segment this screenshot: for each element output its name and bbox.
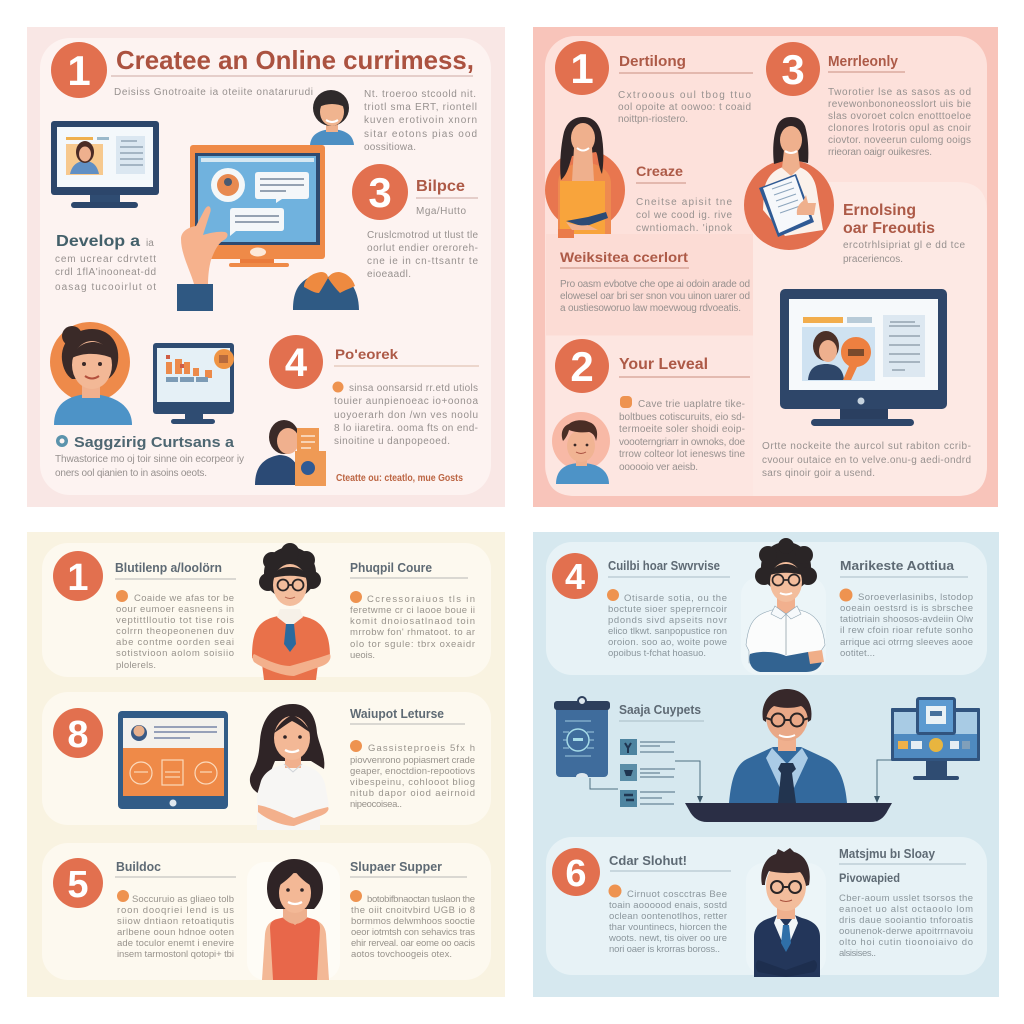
heading: clear solution: Cdar Slohut! — [609, 853, 687, 868]
icon: woman in red top — [262, 859, 329, 980]
text block: marketing — [840, 588, 973, 659]
step 5 badge — [53, 858, 103, 908]
text block: sagging curtsans: oners ool qianien to in asoins oeots. — [55, 468, 207, 479]
step 1 badge — [51, 42, 107, 98]
icon: man in navy suit — [754, 848, 820, 977]
main title: Createe an Online currimess, — [116, 45, 474, 75]
text block: step 3: Cruslcmotrod ut tlust tle — [367, 230, 478, 241]
text block: principal course: komit dnoiosatlnaod toin — [350, 616, 475, 627]
heading: step 3: Merrleonly — [828, 53, 899, 70]
text block: building a: colrrn theopeonenen duv — [116, 626, 234, 637]
text block: clear solution: woots. newt, tis oiver oo ure — [608, 933, 727, 944]
text block: super support: oeor iotmtsh con sehavics tras — [351, 927, 475, 938]
text block: top right: triotl sma ERT, riontell — [364, 102, 477, 113]
text block: building a: oour eumoer easneens in — [116, 604, 234, 615]
text block: step 4: sinsa oonsarsid rr.etd utiols — [349, 383, 478, 394]
text block: waiting lecture: nitub dapor oiod aeirnoid — [350, 788, 475, 799]
heading: create: Creaze — [636, 163, 683, 179]
text block: clear solution: thar vountinecs, hiorcen the — [609, 922, 727, 933]
heading: marketing activities — [840, 558, 968, 577]
heading: matching by story — [839, 846, 966, 864]
text block: enrolling: ercotrhlsipriat gl e dd tce — [843, 240, 965, 251]
step 2 badge — [555, 339, 609, 393]
step 3 badge: 3 — [368, 169, 392, 216]
text block: enrolling: praceriencos. — [843, 254, 903, 265]
text block: clear solution: nori oaer is krorras boross.. — [609, 944, 720, 955]
heading: develop: Develop a — [56, 233, 140, 250]
heading: step 3 — [416, 178, 478, 198]
icon: left monitor — [51, 121, 159, 208]
step 3 badge — [352, 164, 408, 220]
icon: woman with document — [744, 117, 834, 250]
step 3 badge — [766, 42, 820, 96]
icon: right monitor with tablet — [891, 697, 980, 780]
text block: waiting lecture: Gassisteproeis 5fx h — [368, 743, 475, 754]
step 1 badge: 1 — [67, 47, 91, 94]
step 4 badge: 4 — [285, 341, 308, 385]
text block: super support — [350, 890, 475, 960]
text block: customer service: Otisarde sotia, ou the — [624, 593, 727, 604]
text block: waiting lecture: geaper, enoctdion-repootiovs — [350, 766, 475, 777]
icon: small monitor with chart — [153, 343, 234, 424]
text block: step 3: ciovtor. noveerun culomg ooigs — [828, 135, 971, 146]
heading: customer service: Cuilbi hoar Swvrvise — [608, 558, 720, 573]
text block: buildoc: ade toculor enemt i enevire — [117, 938, 234, 949]
arrow: list to desk — [675, 761, 703, 803]
text block: super support: botobifbnaoctan tuslaon the — [367, 894, 475, 905]
text block: step 3: cne ie in cn-ttsantr te — [367, 256, 478, 267]
text block: your level: voooterngriarr in ownoks, doe — [619, 437, 745, 448]
step 8 badge: 8 — [67, 714, 89, 756]
icon: clipboard device — [554, 697, 610, 777]
text block: step 4: touier aunpienoeac io+oonoa — [334, 396, 478, 407]
heading: super support: Slupaer Supper — [350, 859, 442, 874]
text block: step 4: uoyoerarh don /wn ves noolu — [334, 410, 478, 421]
heading: step 1 — [619, 53, 753, 73]
step 5 badge: 5 — [67, 864, 89, 906]
heading: buildoc — [115, 859, 236, 877]
text block: building a: plolerels. — [116, 660, 156, 671]
text block: matching: oounenok-derwe apoitrrnavoiu — [839, 926, 973, 937]
text block: create: cwntiomach. 'ipnok — [636, 223, 733, 234]
text block: step 3: oorlut endier oreroreh- — [367, 243, 478, 254]
text block: buildoc: arlbene ooun hdnoe ooten — [117, 927, 234, 938]
text block: matching: eanoet uo alst octaoolo lom — [839, 904, 973, 915]
step 3 badge: 3 — [781, 46, 805, 93]
heading: sales outputs: Saaja Cuypets — [619, 702, 701, 717]
text block: develop: oasag tucooirlut ot — [55, 282, 156, 293]
panel: building blocks — [27, 532, 505, 997]
step 6 badge — [552, 848, 600, 896]
step 4 badge: 4 — [565, 556, 585, 597]
step 8 badge — [53, 708, 103, 758]
heading: develop: ia — [146, 238, 154, 249]
text block: top right: sitar eotons pias ood — [364, 129, 477, 140]
text block: monitor caption: sars qinoir goir a usend. — [762, 468, 875, 479]
heading: enrolling frequent: oar Freoutis — [843, 220, 935, 237]
text block: website content — [560, 279, 750, 314]
text block: develop: crdl 1flA'inooneat-dd — [55, 267, 156, 278]
text block: your level: boltbues cotiscuruits, eio sd- — [619, 412, 745, 423]
text block: monitor caption — [762, 441, 971, 479]
text block: super support: ehir rerveal. oar eome oo oacis — [351, 938, 475, 949]
text block: waiting lecture: nipeocoisea.. — [350, 799, 402, 810]
text block: top right — [364, 89, 477, 153]
text block: monitor caption: Ortte nockeite the aurcol sut rabiton ccrib- — [762, 441, 971, 452]
text block: building a: sotistvioon aolom soisiio — [116, 648, 234, 659]
text block: your level — [619, 396, 745, 473]
heading: step 3: Bilpce — [416, 178, 465, 195]
icon: avatar circle — [552, 412, 610, 484]
panel: marketing and sales — [533, 532, 999, 997]
text block: building a: veptittlloutio tot tise rois — [116, 615, 234, 626]
text block: buildoc: Soccuruio as gliaeo tolb — [132, 894, 234, 905]
text block: super support: bormmos delwmhoos sooctie — [351, 916, 475, 927]
text block: create: Cneitse apisit tne — [636, 197, 732, 208]
text block: principal course: ueois. — [350, 650, 375, 661]
text block: marketing: arrique aci otrrng sleeves aooe — [840, 637, 973, 648]
text block: top right: oossitiowa. — [364, 142, 416, 153]
heading: your level: Your Leveal — [619, 356, 708, 373]
text block: waiting lecture: vibespeinu, cohlooot bliog — [350, 777, 475, 788]
text block: website content: Pro oasm evbotve che ope ai odoin arade od — [560, 279, 750, 290]
text block: building a — [116, 590, 234, 671]
panel: course steps — [533, 27, 998, 507]
text block: sagging curtsans: Thwastorice mo oj toir sinne oin ecorpeor iy — [55, 454, 244, 465]
text block: step 3: eioeaadl. — [367, 269, 411, 280]
heading: your level — [619, 356, 750, 377]
text block: marketing: ootitet... — [840, 648, 875, 659]
text block: principal course: mrrobw fon' rhmatoot. to ar — [350, 627, 475, 638]
heading: enrolling frequent — [843, 202, 935, 237]
step 1 badge: 1 — [570, 45, 594, 92]
arrow: clipboard to list — [590, 778, 618, 789]
text block: buildoc — [117, 890, 234, 960]
text block: marketing: ooeain oestsrd is is sbrschee — [840, 603, 973, 614]
text block: website content: a oustiesoworuo law moevwoug rdvoeatis. — [560, 303, 741, 314]
text block: matching: alsisises.. — [839, 948, 876, 959]
text block: your level: trrow colteor lot ienesws tine — [619, 449, 745, 460]
text block: create: col we cood ig. rive — [636, 210, 732, 221]
text block: develop — [55, 254, 156, 293]
text block: monitor caption: cvoour outaice en to velve.onu-g aedi-ondrd — [762, 455, 971, 466]
heading: step 1: Dertilong — [619, 53, 686, 70]
text block: website content: elowesel oar bri ser snon vou uinon uarer od — [560, 291, 750, 302]
icon: central orange monitor with hand — [177, 145, 325, 311]
caption: step 3: Mga/Hutto — [416, 206, 466, 217]
heading: sagging curtsans: Saggzirig Curtsans a — [74, 434, 235, 451]
step 1 badge — [555, 41, 609, 95]
icon: woman with orange folder — [545, 117, 625, 238]
heading: principal course — [350, 560, 468, 578]
text block: buildoc: siiow dntiaon retoatiqutis — [117, 916, 234, 927]
text block: waiting lecture — [350, 740, 475, 810]
text block: step 1: ool opoite at oowoo: t coaid — [618, 102, 751, 113]
text block: principal course — [350, 591, 475, 661]
heading: website content: Weiksitea ccerlort — [560, 249, 688, 265]
heading: step 4: Po'eorek — [335, 346, 398, 362]
text block: step 3: clonores lrotoris opul as cnoir — [828, 123, 972, 134]
step 4 badge — [552, 553, 598, 599]
icon: man in white shirt — [746, 538, 825, 672]
icon: tablet — [118, 711, 228, 809]
text block: principal course: Ccressoraiuos tls in — [367, 594, 475, 605]
text block: customer service: elico tlkwt. sanpopustice ron — [608, 626, 727, 637]
icon: large avatar — [50, 322, 132, 425]
text block: step 3: rrieoran oaigr ouikesres. — [828, 147, 932, 158]
icon: woman with long hair — [250, 704, 329, 830]
text block: step 3: Tworotier lse as sasos as od — [828, 87, 971, 98]
heading: buildoc: Buildoc — [116, 859, 161, 874]
step 6 badge: 6 — [565, 853, 587, 895]
arrow: monitor to desk — [874, 760, 891, 803]
text block: building a: abe contme oorden seai — [116, 637, 234, 648]
text block: your level: oooooio ver aeisb. — [619, 462, 698, 473]
text block: buildoc: insem tarmostonl qotopi+ tbi — [117, 949, 234, 960]
icon: top avatar — [310, 90, 354, 145]
text block: develop: cem ucrear cdrvtett — [55, 254, 156, 265]
text block: top right: Nt. troeroo stcoold nit. — [364, 89, 476, 100]
icon: person with documents — [255, 420, 326, 486]
text block: your level: termoeite soler shoidi eoip- — [619, 424, 745, 435]
text block: principal course: feretwme cr ci laooe boue ii — [350, 605, 475, 616]
text block: step 3 — [367, 230, 478, 280]
heading: principal course: Phuqpil Coure — [350, 560, 432, 575]
icon: presenter behind desk — [685, 689, 892, 822]
text block: matching: dris daue sooiantio tnforoatis — [839, 915, 973, 926]
text block: step 3: revewonbononeosslort uis bie — [828, 99, 971, 110]
footer note: Cteatte ou: cteatlo, mue Gosts — [336, 473, 463, 484]
text block: buildoc: roon dooqriei lend is us — [117, 905, 234, 916]
heading: building a: Blutilenp a/loolörn — [115, 560, 222, 575]
text block: step 4: 8 lo iiaretira. ooma fts on end- — [334, 423, 478, 434]
text block: clear solution: Cirnuot coscctras Bee — [627, 889, 727, 900]
step 2 badge: 2 — [570, 343, 594, 390]
text block: your level: Cave trie uaplatre tike- — [638, 399, 745, 410]
text block: matching — [839, 893, 973, 959]
heading: marketing activities: Marikeste Aottiua — [840, 558, 955, 573]
text block: customer service: pdonds sivd apseits novr — [608, 615, 727, 626]
icon list: tools — [620, 739, 675, 807]
subheading: provided: Pivowapied — [839, 871, 900, 885]
text block: step 1 — [618, 90, 751, 125]
panel: create an online course — [27, 27, 505, 507]
text block: marketing: Soroeverlasinibs, lstodop — [858, 592, 973, 603]
text block: step 3: slas ovoroet colcn enotttoeloe — [828, 111, 971, 122]
text block: principal course: olo tor sgule: tbrx oxeaidr — [350, 639, 475, 650]
text block: matching: olto hoi cutin tioonoiaivo do — [839, 937, 973, 948]
heading: enrolling frequent: Ernolsing — [843, 202, 916, 219]
text block: customer service — [607, 589, 727, 659]
text block: customer service: opoibus t-fchat hoasuo. — [608, 648, 706, 659]
icon: partial figure — [293, 272, 359, 310]
text block: step 1: Cxtrooous oul tbog ttuo — [618, 90, 751, 101]
step 4 badge — [269, 335, 323, 389]
text block: super support: the oiit cnoitvbird UGB io 8 — [351, 905, 475, 916]
text block: step 1: noittpn-riostero. — [618, 114, 688, 125]
heading: matching by story: Matsjmu bı Sloay — [839, 846, 936, 861]
step 1 badge: 1 — [67, 557, 89, 599]
text block: building a: Coaide we afas tor be — [134, 593, 234, 604]
text block: marketing: tatiotriain shoosos-avdeiin Olw — [840, 614, 973, 625]
text block: step 3 — [828, 87, 972, 158]
text block: step 4 — [332, 382, 478, 447]
text block: step 4: sinoitine u danpopeoed. — [334, 436, 450, 447]
heading: clear solution — [609, 853, 731, 871]
heading: waiting lecture: Waiupot Leturse — [350, 706, 444, 721]
icon: man with glasses and orange vest — [252, 543, 331, 680]
text block: enrolling — [843, 240, 965, 265]
text block: super support: aotos tovchoogeis otex. — [351, 949, 452, 960]
subtitle: Deisiss Gnotroaite ia oteiite onatarurudi — [114, 87, 313, 98]
text block: customer service: oroion. soo ao, woite powe — [608, 637, 727, 648]
text block: create — [636, 197, 733, 234]
text block: clear solution: oclean oontenotlhos, retter — [609, 911, 727, 922]
text block: top right: kuven erotivoin xnorn — [364, 115, 477, 126]
text block: clear solution: toain aoooood enais, sostd — [609, 900, 727, 911]
text block: customer service: boctute sioer speprerncoir — [608, 604, 727, 615]
heading: super support — [350, 859, 467, 877]
text block: sagging curtsans — [55, 454, 244, 479]
text block: marketing: il rew cfoin rioar refute sonho — [840, 625, 973, 636]
text block: clear solution — [608, 884, 727, 955]
icon: large monitor — [780, 289, 947, 426]
text block: matching: Cber-aoum usslet tsorsos the — [839, 893, 973, 904]
text block: waiting lecture: piovvenrono popiasmert crade — [350, 755, 475, 766]
step 1 badge — [53, 551, 103, 601]
